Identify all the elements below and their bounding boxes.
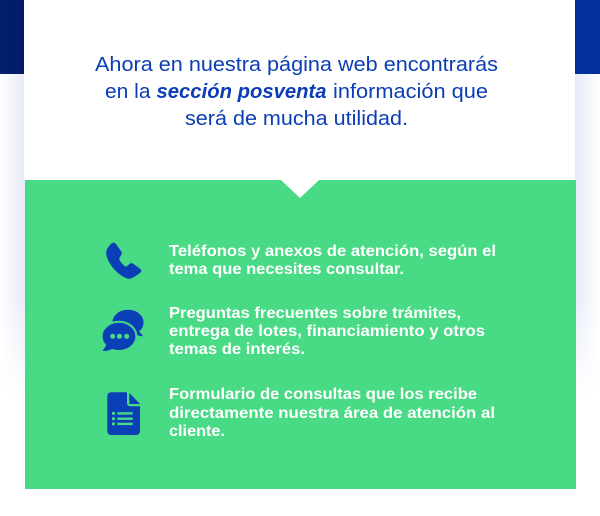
text: formulario: Formulario de consultas que los recibe bbox=[169, 386, 477, 403]
icon: phone bbox=[107, 243, 141, 278]
text: teléfonos: Teléfonos y anexos de atención, según el bbox=[169, 243, 496, 260]
text: formulario: cliente. bbox=[169, 423, 225, 440]
intro text: será de mucha utilidad. bbox=[185, 108, 408, 130]
text: teléfonos bbox=[169, 243, 496, 278]
intro text: Ahora en nuestra página web encontrarás bbox=[95, 54, 498, 76]
panel: green features with notch bbox=[25, 180, 576, 489]
intro text: sección posventa bbox=[156, 81, 326, 103]
intro text bbox=[95, 54, 498, 130]
text: preguntas: Preguntas frecuentes sobre trámites, bbox=[169, 305, 461, 322]
panel: white intro bbox=[24, 0, 575, 180]
top band right bbox=[575, 0, 600, 74]
side shadows bbox=[8, 74, 592, 366]
intro text: en la bbox=[105, 81, 151, 103]
text: teléfonos: tema que necesites consultar. bbox=[169, 261, 404, 278]
text: formulario: directamente nuestra área de atención al bbox=[169, 405, 495, 422]
text: formulario bbox=[169, 386, 495, 440]
icon: document form bbox=[107, 392, 140, 435]
text: preguntas bbox=[169, 305, 485, 358]
intro text: información que bbox=[333, 81, 488, 103]
icon: chat bubbles bbox=[102, 310, 144, 351]
top band left bbox=[0, 0, 24, 74]
text: preguntas: temas de interés. bbox=[169, 341, 305, 358]
text: preguntas: entrega de lotes, financiamiento y otros bbox=[169, 323, 485, 340]
